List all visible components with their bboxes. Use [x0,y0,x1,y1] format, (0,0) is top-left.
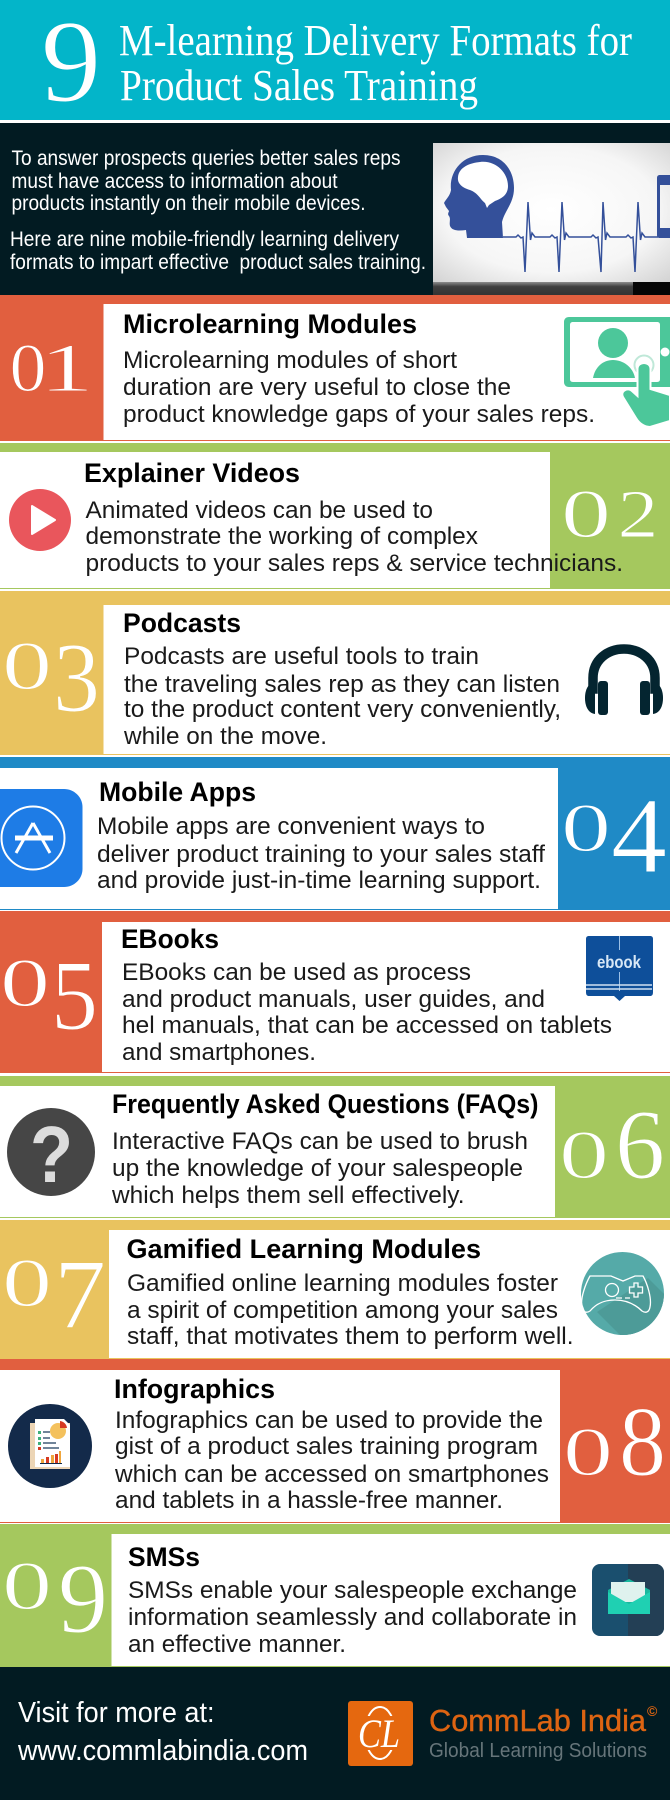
header banner [0,0,670,127]
row 03: podcasts [0,591,670,755]
body text: Podcasts are useful tools to train [124,643,479,670]
body text: Infographics can be used to provide the [115,1407,543,1434]
row 05: ebooks [0,911,670,1073]
body text: Mobile apps are convenient ways to [97,813,485,840]
body text: and smartphones. [122,1039,316,1066]
number 06: 0 [559,1117,609,1193]
title [119,16,632,110]
row panel [104,605,670,754]
number 03: 0 [2,628,52,704]
row 06: FAQs [0,1076,670,1218]
number 05 [0,940,98,1051]
row panel [104,304,670,440]
body text: duration are very useful to close the [123,374,511,401]
number 02: 0 [561,476,611,552]
logo wordmark: © [647,1703,658,1719]
logo mark: CL [358,1711,400,1756]
number 04: 4 [611,777,667,896]
heading: Microlearning Modules [123,309,417,339]
body text: the traveling sales rep as they can listen [124,671,560,698]
footer link text [17,1697,308,1767]
body text [86,497,623,577]
intro text: formats to impart effective product sales training. [10,250,426,274]
body text [123,643,561,750]
body text: an effective manner. [128,1631,346,1658]
row 01: microlearning modules [0,295,670,441]
body text: up the knowledge of your salespeople [112,1155,523,1182]
heading: Frequently Asked Questions (FAQs) [112,1089,538,1119]
footer link text: www.commlabindia.com [17,1735,308,1767]
icon: question mark [7,1108,95,1199]
number 01: 0 [10,330,46,406]
row panel [112,1534,670,1666]
body text [123,347,595,428]
row panel [0,768,558,909]
row 08: infographics [0,1359,670,1523]
number 09: 9 [58,1543,108,1654]
number 02 [561,476,658,552]
number 07 [2,1239,106,1350]
logo wordmark: CommLab India [429,1703,647,1738]
intro text [10,146,426,274]
body text: information seamlessly and collaborate in [128,1604,577,1631]
icon: report document [8,1404,92,1488]
row 07: gamified learning [0,1220,670,1359]
number 03: 3 [53,622,100,733]
heading: Mobile Apps [99,777,256,807]
footer [0,1667,670,1800]
body text: and provide just-in-time learning support. [97,867,541,894]
body text [128,1577,577,1658]
icon: question mark: ? [30,1110,73,1199]
heading: SMSs [128,1542,200,1572]
number 08: 8 [619,1386,666,1497]
number 08 [563,1386,666,1497]
body text: while on the move. [123,723,327,750]
body text [127,1270,574,1350]
icon: game controller [581,1252,664,1335]
number 06: 6 [615,1089,665,1200]
row panel [109,1230,670,1358]
icon: tablet with touch [564,317,670,427]
body text: Interactive FAQs can be used to brush [112,1128,528,1155]
body text: Animated videos can be used to [86,497,433,524]
number 03 [2,622,100,733]
body text: which can be accessed on smartphones [114,1461,549,1488]
number 09 [2,1543,108,1654]
body text: a spirit of competition among your sales [127,1297,558,1324]
title: Product Sales Training [120,61,478,110]
body text: staff, that motivates them to perform well. [127,1323,574,1350]
body text: and product manuals, user guides, and [122,986,545,1013]
number 07: 0 [2,1245,52,1321]
number 04 [561,777,667,896]
intro text: To answer prospects queries better sales reps [12,146,400,170]
icon: ebook [586,936,653,1001]
row panel [0,1086,555,1217]
intro text: products instantly on their mobile devices. [12,191,366,215]
heading: Podcasts [123,608,241,638]
body text [111,1128,528,1209]
body text: hel manuals, that can be accessed on tablets [122,1012,612,1039]
body text: Microlearning modules of short [123,347,457,374]
body text: demonstrate the working of complex [86,523,478,550]
heading: Gamified Learning Modules [126,1234,481,1264]
footer link text: Visit for more at: [18,1697,214,1729]
intro panel [0,123,670,295]
logo wordmark: Global Learning Solutions [429,1740,647,1762]
number 02: 2 [618,476,658,552]
number 05: 0 [0,945,50,1021]
number 01: 1 [39,330,94,406]
row 02: explainer videos [0,443,670,589]
body text [122,959,612,1066]
number 04: 0 [561,790,611,866]
body text: to the product content very conveniently, [124,696,561,723]
body text: gist of a product sales training program [115,1433,538,1460]
row 09: SMSs [0,1524,670,1667]
icon: headphones [585,646,663,715]
body text: which helps them sell effectively. [111,1182,464,1209]
heading: Infographics [114,1374,275,1404]
number 01 [10,330,94,406]
logo wordmark [429,1703,658,1762]
body text: product knowledge gaps of your sales reps. [123,401,595,428]
body text: SMSs enable your salespeople exchange [128,1577,577,1604]
brain and heartbeat image [433,143,670,295]
intro text: must have access to information about [12,169,338,193]
logo mark [348,1701,413,1766]
row panel [0,452,550,588]
body text [97,813,545,894]
number 08: 0 [563,1414,613,1490]
body text: products to your sales reps & service technicians. [86,550,623,577]
number 09: 0 [2,1548,52,1624]
body text: EBooks can be used as process [122,959,471,986]
body text: and tablets in a hassle-free manner. [115,1487,503,1514]
heading: Explainer Videos [84,458,300,488]
number 05: 5 [51,940,98,1051]
icon: app store [0,789,82,887]
icon: envelope [592,1564,664,1636]
number 07: 7 [54,1239,106,1350]
heading: EBooks [121,924,219,954]
icon: ebook: ebook [597,952,641,972]
row panel [102,922,670,1072]
body text [114,1407,549,1514]
body text: Gamified online learning modules foster [127,1270,558,1297]
intro text: Here are nine mobile-friendly learning delivery [10,227,399,251]
icon: play button [9,489,71,551]
row 04: mobile apps [0,757,670,910]
number 06 [559,1089,665,1200]
row panel [0,1370,560,1522]
body text: deliver product training to your sales staff [97,841,545,868]
